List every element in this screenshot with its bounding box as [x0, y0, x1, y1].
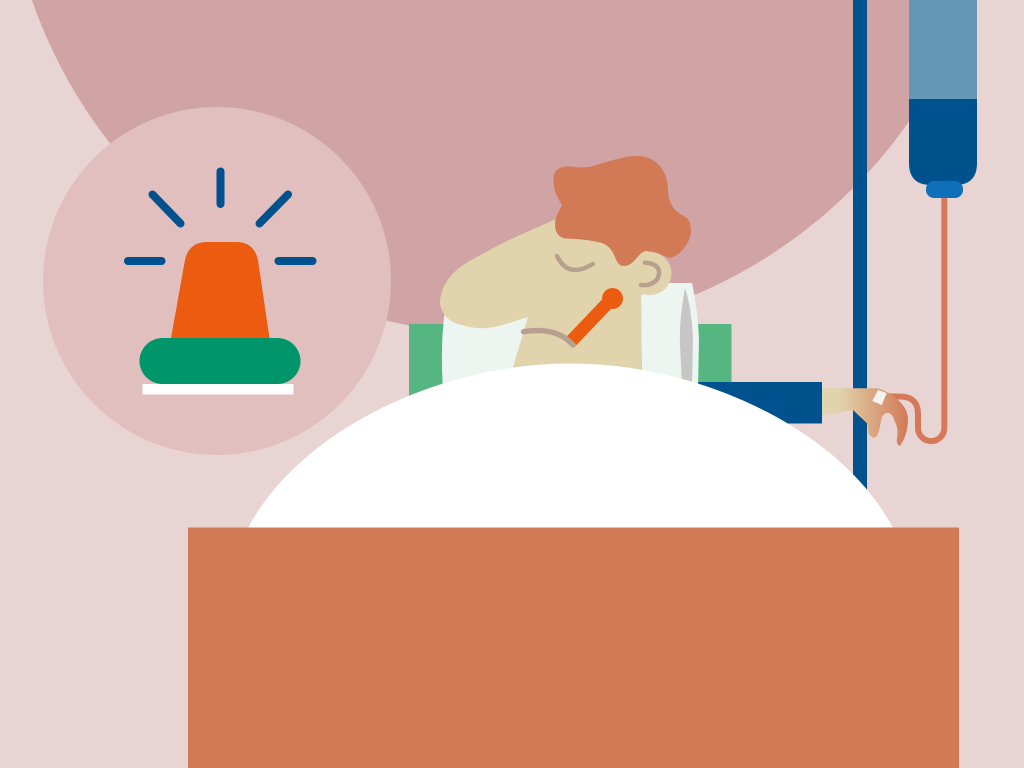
alarm rays	[128, 172, 312, 261]
mouth	[524, 331, 573, 345]
closed eye	[557, 256, 593, 270]
inner ear	[641, 263, 659, 285]
large background circle	[4, 0, 998, 334]
shirt right	[641, 283, 699, 390]
hair	[553, 156, 691, 266]
icon: alarm siren	[43, 107, 391, 455]
alarm white plinth	[142, 384, 294, 394]
patient	[440, 156, 908, 446]
iv bag fluid	[909, 99, 977, 185]
thermometer bulb	[602, 288, 623, 309]
headboard	[409, 324, 732, 414]
hand	[822, 388, 908, 446]
iv bag cap	[926, 181, 963, 198]
iv bag upper	[909, 0, 977, 100]
thermometer stem	[572, 304, 607, 341]
iv bag	[884, 0, 977, 441]
alarm dome	[171, 242, 270, 338]
bandage	[872, 390, 887, 405]
blanket	[248, 364, 893, 528]
face and neck	[440, 219, 650, 385]
alarm badge circle	[43, 107, 391, 455]
ear	[628, 252, 672, 295]
iv tube	[884, 196, 944, 441]
alarm base	[140, 338, 300, 384]
shirt left	[442, 310, 530, 390]
bed	[188, 528, 959, 768]
pillow fold	[680, 288, 693, 385]
iv pole	[853, 0, 867, 500]
arm sleeve	[690, 382, 822, 424]
thermometer	[572, 288, 623, 341]
